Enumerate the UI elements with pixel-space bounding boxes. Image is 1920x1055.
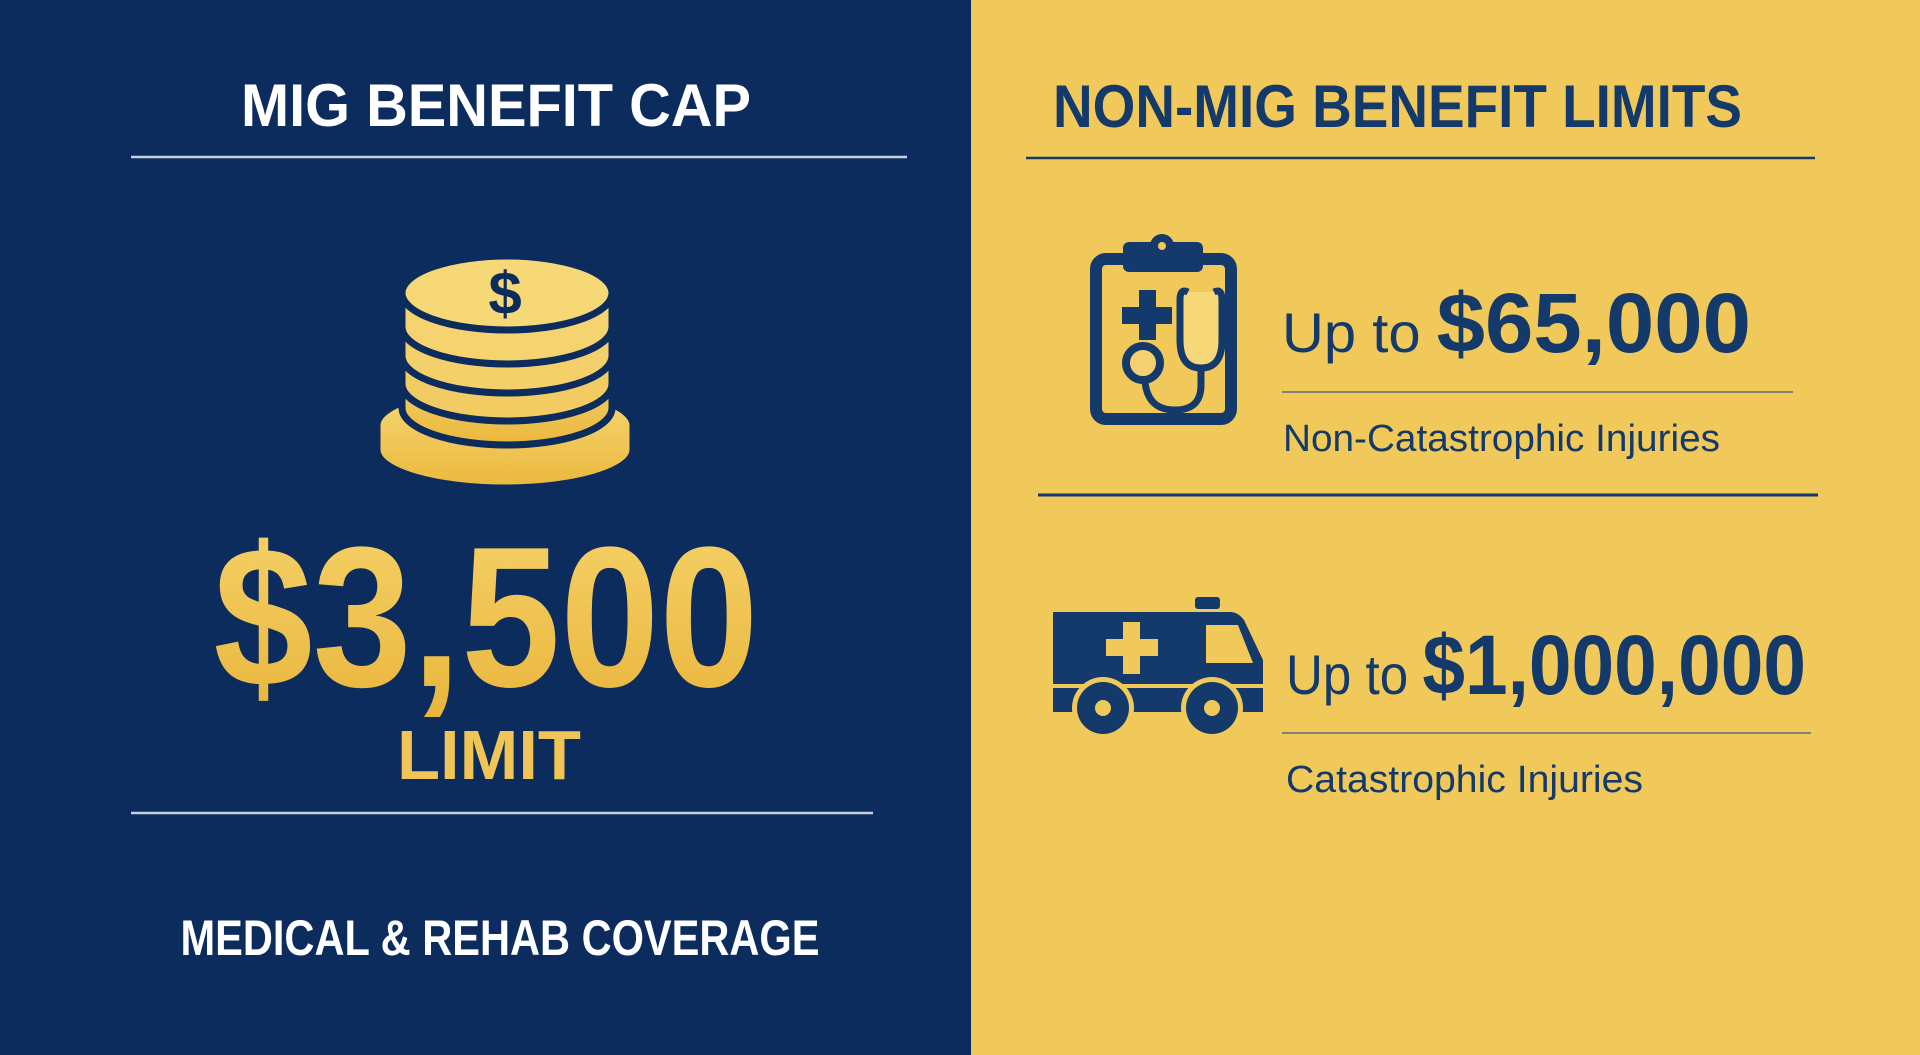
label: LIMIT: LIMIT — [397, 716, 581, 794]
panel: MIG benefit cap — [0, 0, 971, 1055]
stat: up to $1,000,000: Up to $1,000,000 — [1286, 618, 1806, 712]
heading: MIG BENEFIT CAP: MIG BENEFIT CAP — [241, 72, 751, 139]
label: non-catastrophic injuries: Non-Catastrophic Injuries — [1283, 418, 1720, 460]
panel: MIG benefit cap: $ — [488, 260, 522, 327]
heading: NON-MIG BENEFIT LIMITS: NON-MIG BENEFIT LIMITS — [1053, 73, 1742, 140]
stat: up to $65,000: Up to $65,000 — [1282, 276, 1751, 370]
caption: medical & rehab coverage: MEDICAL & REHAB COVERAGE — [180, 910, 820, 966]
icon: ambulance — [1053, 597, 1263, 739]
stat: $3,500: $3,500 — [214, 506, 758, 729]
label: catastrophic injuries: Catastrophic Injuries — [1286, 759, 1643, 801]
panel: Non-MIG benefit limits — [971, 0, 1920, 1055]
icon: coin stack — [377, 256, 633, 488]
icon: clipboard with stethoscope — [1096, 234, 1231, 419]
